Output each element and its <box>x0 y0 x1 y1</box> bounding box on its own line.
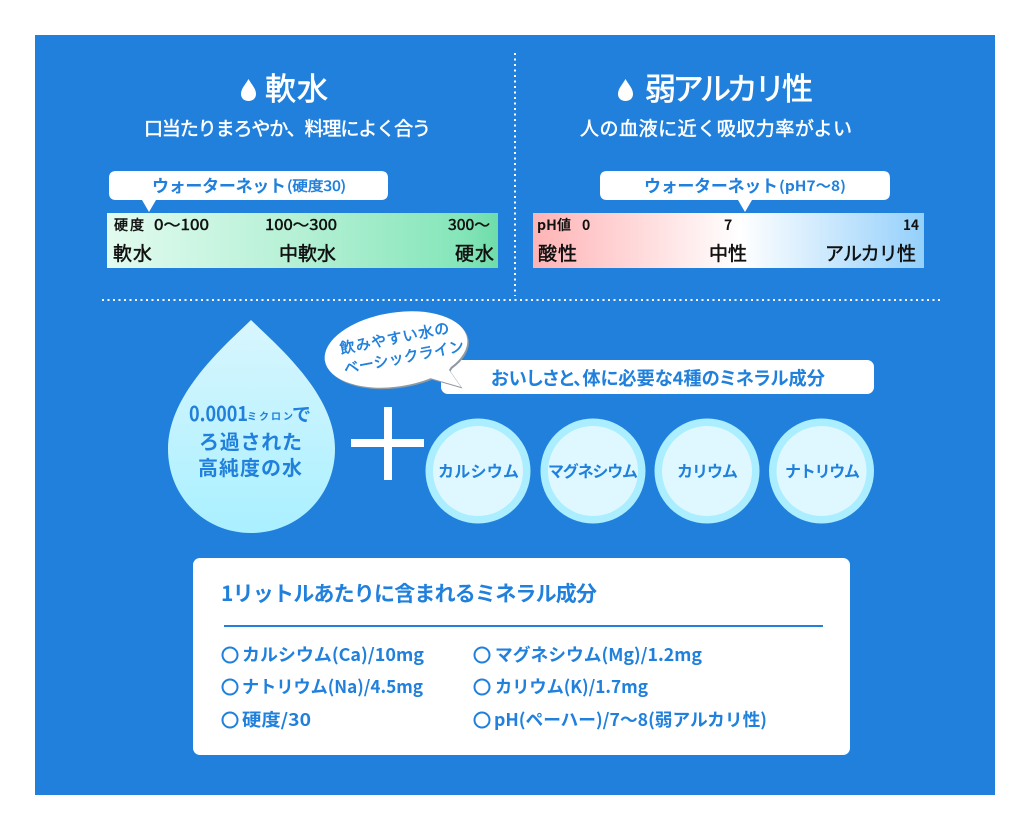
icon: soft water drop <box>241 79 256 101</box>
scale bar: pH: 14 <box>903 215 919 235</box>
mineral: sodium <box>769 418 874 524</box>
mineral: magnesium <box>540 418 646 524</box>
callout: water net hardness: ウォーターネット <box>152 172 286 197</box>
scale bar: hardness: 300～ <box>448 214 490 235</box>
panel: minerals per liter <box>193 558 850 755</box>
list: right column <box>474 642 767 732</box>
scale bar: hardness: 軟水 <box>113 239 152 266</box>
list: left column: ナトリウム(Na)/4.5mg <box>242 674 424 699</box>
list: right column: pH(ペーハー)/7～8(弱アルカリ性) <box>494 707 767 732</box>
large water drop: 0.0001 <box>189 398 248 427</box>
subheading: soft water: 口当たりまろやか、料理によく合う <box>144 114 431 141</box>
scale bar: pH: 7 <box>724 215 732 235</box>
scale bar: pH: 酸性 <box>538 239 577 266</box>
scale bar: pH: 中性 <box>709 239 747 266</box>
scale bar: hardness <box>107 213 498 268</box>
large water drop: で <box>292 400 311 427</box>
label: four minerals: おいしさと、体に必要な4種のミネラル成分 <box>491 365 825 391</box>
scale bar: hardness: 0～100 <box>154 214 209 235</box>
scale bar: pH: 0 <box>582 215 590 235</box>
callout: water net pH: (pH7～8) <box>779 176 846 196</box>
scale bar: hardness: 中軟水 <box>279 239 336 266</box>
speech bubble: 飲みやすい水の <box>338 317 451 359</box>
scale bar: pH: pH値 <box>537 215 571 235</box>
mineral: sodium: ナトリウム <box>785 458 860 482</box>
icon: alkaline drop <box>618 79 633 101</box>
list: left column: 硬度/30 <box>242 707 311 732</box>
scale bar: hardness: 硬水 <box>455 239 494 266</box>
list: right column: カリウム(K)/1.7mg <box>495 674 649 699</box>
mineral: potassium: カリウム <box>677 458 738 482</box>
mineral: calcium: カルシウム <box>438 458 519 482</box>
speech bubble: ベーシックライン <box>342 335 466 379</box>
heading: soft water: 軟水 <box>265 64 328 109</box>
scale bar: hardness: 硬度 <box>114 215 144 235</box>
panel heading: 1リットルあたりに含まれるミネラル成分 <box>221 578 597 608</box>
large water drop: ろ過された <box>199 426 302 455</box>
speech bubble <box>319 302 474 399</box>
list: right column: マグネシウム(Mg)/1.2mg <box>495 642 703 667</box>
large water drop <box>168 320 335 533</box>
panel: weak alkaline <box>533 64 924 268</box>
scale bar: pH: アルカリ性 <box>825 239 916 266</box>
subheading: weak alkaline: 人の血液に近く吸収力率がよい <box>580 114 852 141</box>
callout: water net pH <box>600 171 890 212</box>
callout: water net hardness: (硬度30) <box>287 176 346 196</box>
scale bar: pH <box>533 213 924 268</box>
large water drop: ミクロン <box>247 408 293 423</box>
list: left column <box>222 642 425 732</box>
mineral: potassium <box>654 418 760 524</box>
mineral: magnesium: マグネシウム <box>548 458 638 482</box>
plus icon <box>351 407 424 480</box>
large water drop: 高純度の水 <box>198 452 302 481</box>
mineral: calcium <box>426 418 530 524</box>
scale bar: hardness: 100～300 <box>265 214 337 235</box>
callout: water net pH: ウォーターネット <box>644 172 778 197</box>
callout: water net hardness <box>109 171 388 212</box>
label: four minerals <box>441 360 874 394</box>
list: left column: カルシウム(Ca)/10mg <box>242 642 425 667</box>
heading: weak alkaline: 弱アルカリ性 <box>645 64 813 109</box>
panel: soft water <box>107 64 498 268</box>
